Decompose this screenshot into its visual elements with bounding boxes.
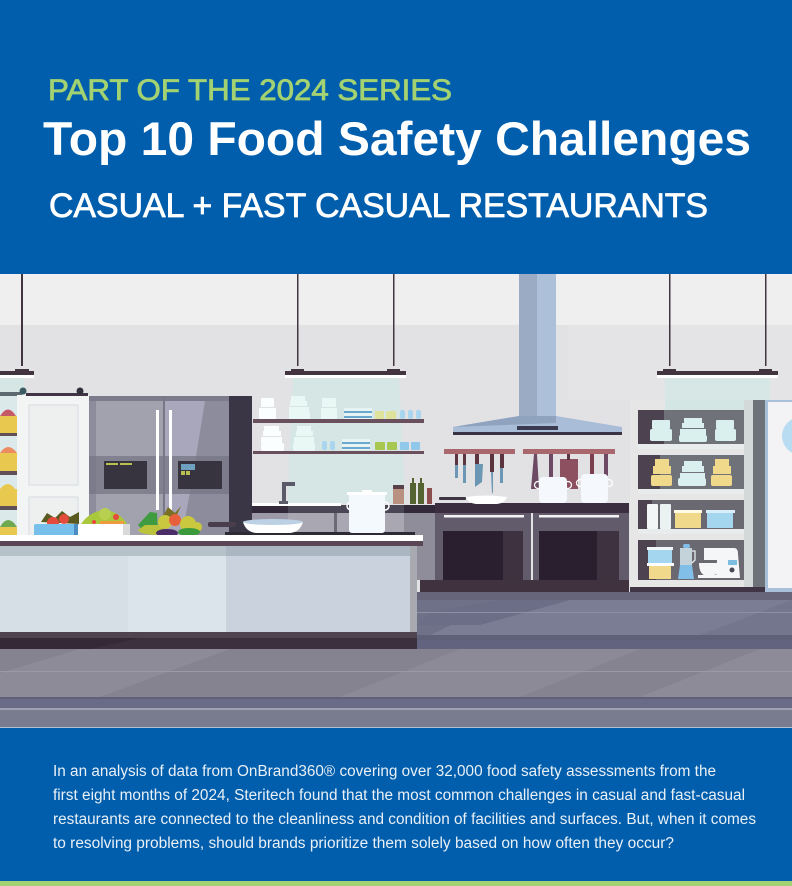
intro text: restaurants are connected to the cleanliness and condition of facilities and surfaces. But, when it comes: [53, 811, 756, 828]
door handles: [156, 410, 159, 510]
hanging knives and utensils: [444, 449, 615, 494]
title: Top 10 Food Safety Challenges: [43, 112, 751, 165]
intro text: to resolving problems, should brands prioritize them solely based on how often they occur?: [53, 835, 674, 852]
green footer bar: [0, 881, 792, 886]
ovens: [420, 503, 629, 592]
kitchen illustration: [0, 274, 792, 728]
intro text: In an analysis of data from OnBrand360® covering over 32,000 food safety assessments from the: [53, 763, 716, 780]
stand mixer: [704, 548, 740, 578]
back counter with sink: [240, 482, 435, 580]
pendant lamps: [0, 274, 778, 378]
steel refrigerator: [89, 396, 252, 536]
storage shelf unit: [630, 400, 765, 592]
intro text: [53, 763, 756, 852]
intro text: first eight months of 2024, Steritech found that the most common challenges in casual and fast-casual: [53, 787, 745, 804]
faucet: [282, 482, 295, 503]
intro panel: [0, 728, 792, 881]
produce bowls: [34, 508, 130, 538]
subtitle: CASUAL + FAST CASUAL RESTAURANTS: [49, 187, 708, 225]
light beams: [0, 377, 770, 503]
header panel: [0, 0, 792, 274]
containers: [648, 548, 672, 563]
cooktop pot and pan: [208, 478, 432, 537]
island counter: [0, 535, 423, 649]
open produce rack: [0, 392, 22, 535]
white fridge: [17, 388, 89, 536]
dispensers: [104, 461, 147, 489]
wall shelves with dishes: [253, 396, 424, 454]
glasses and containers: [647, 504, 658, 529]
floor: [0, 592, 792, 728]
shelf boards: [638, 444, 744, 449]
right door: [765, 400, 792, 592]
stove pots: [439, 474, 612, 504]
wall: [0, 274, 792, 595]
stacked bowls: [650, 418, 736, 486]
produce on cutting board: [138, 506, 202, 539]
range hood: [453, 274, 622, 435]
blender: [680, 548, 692, 565]
series label: PART OF THE 2024 SERIES: [48, 74, 452, 107]
